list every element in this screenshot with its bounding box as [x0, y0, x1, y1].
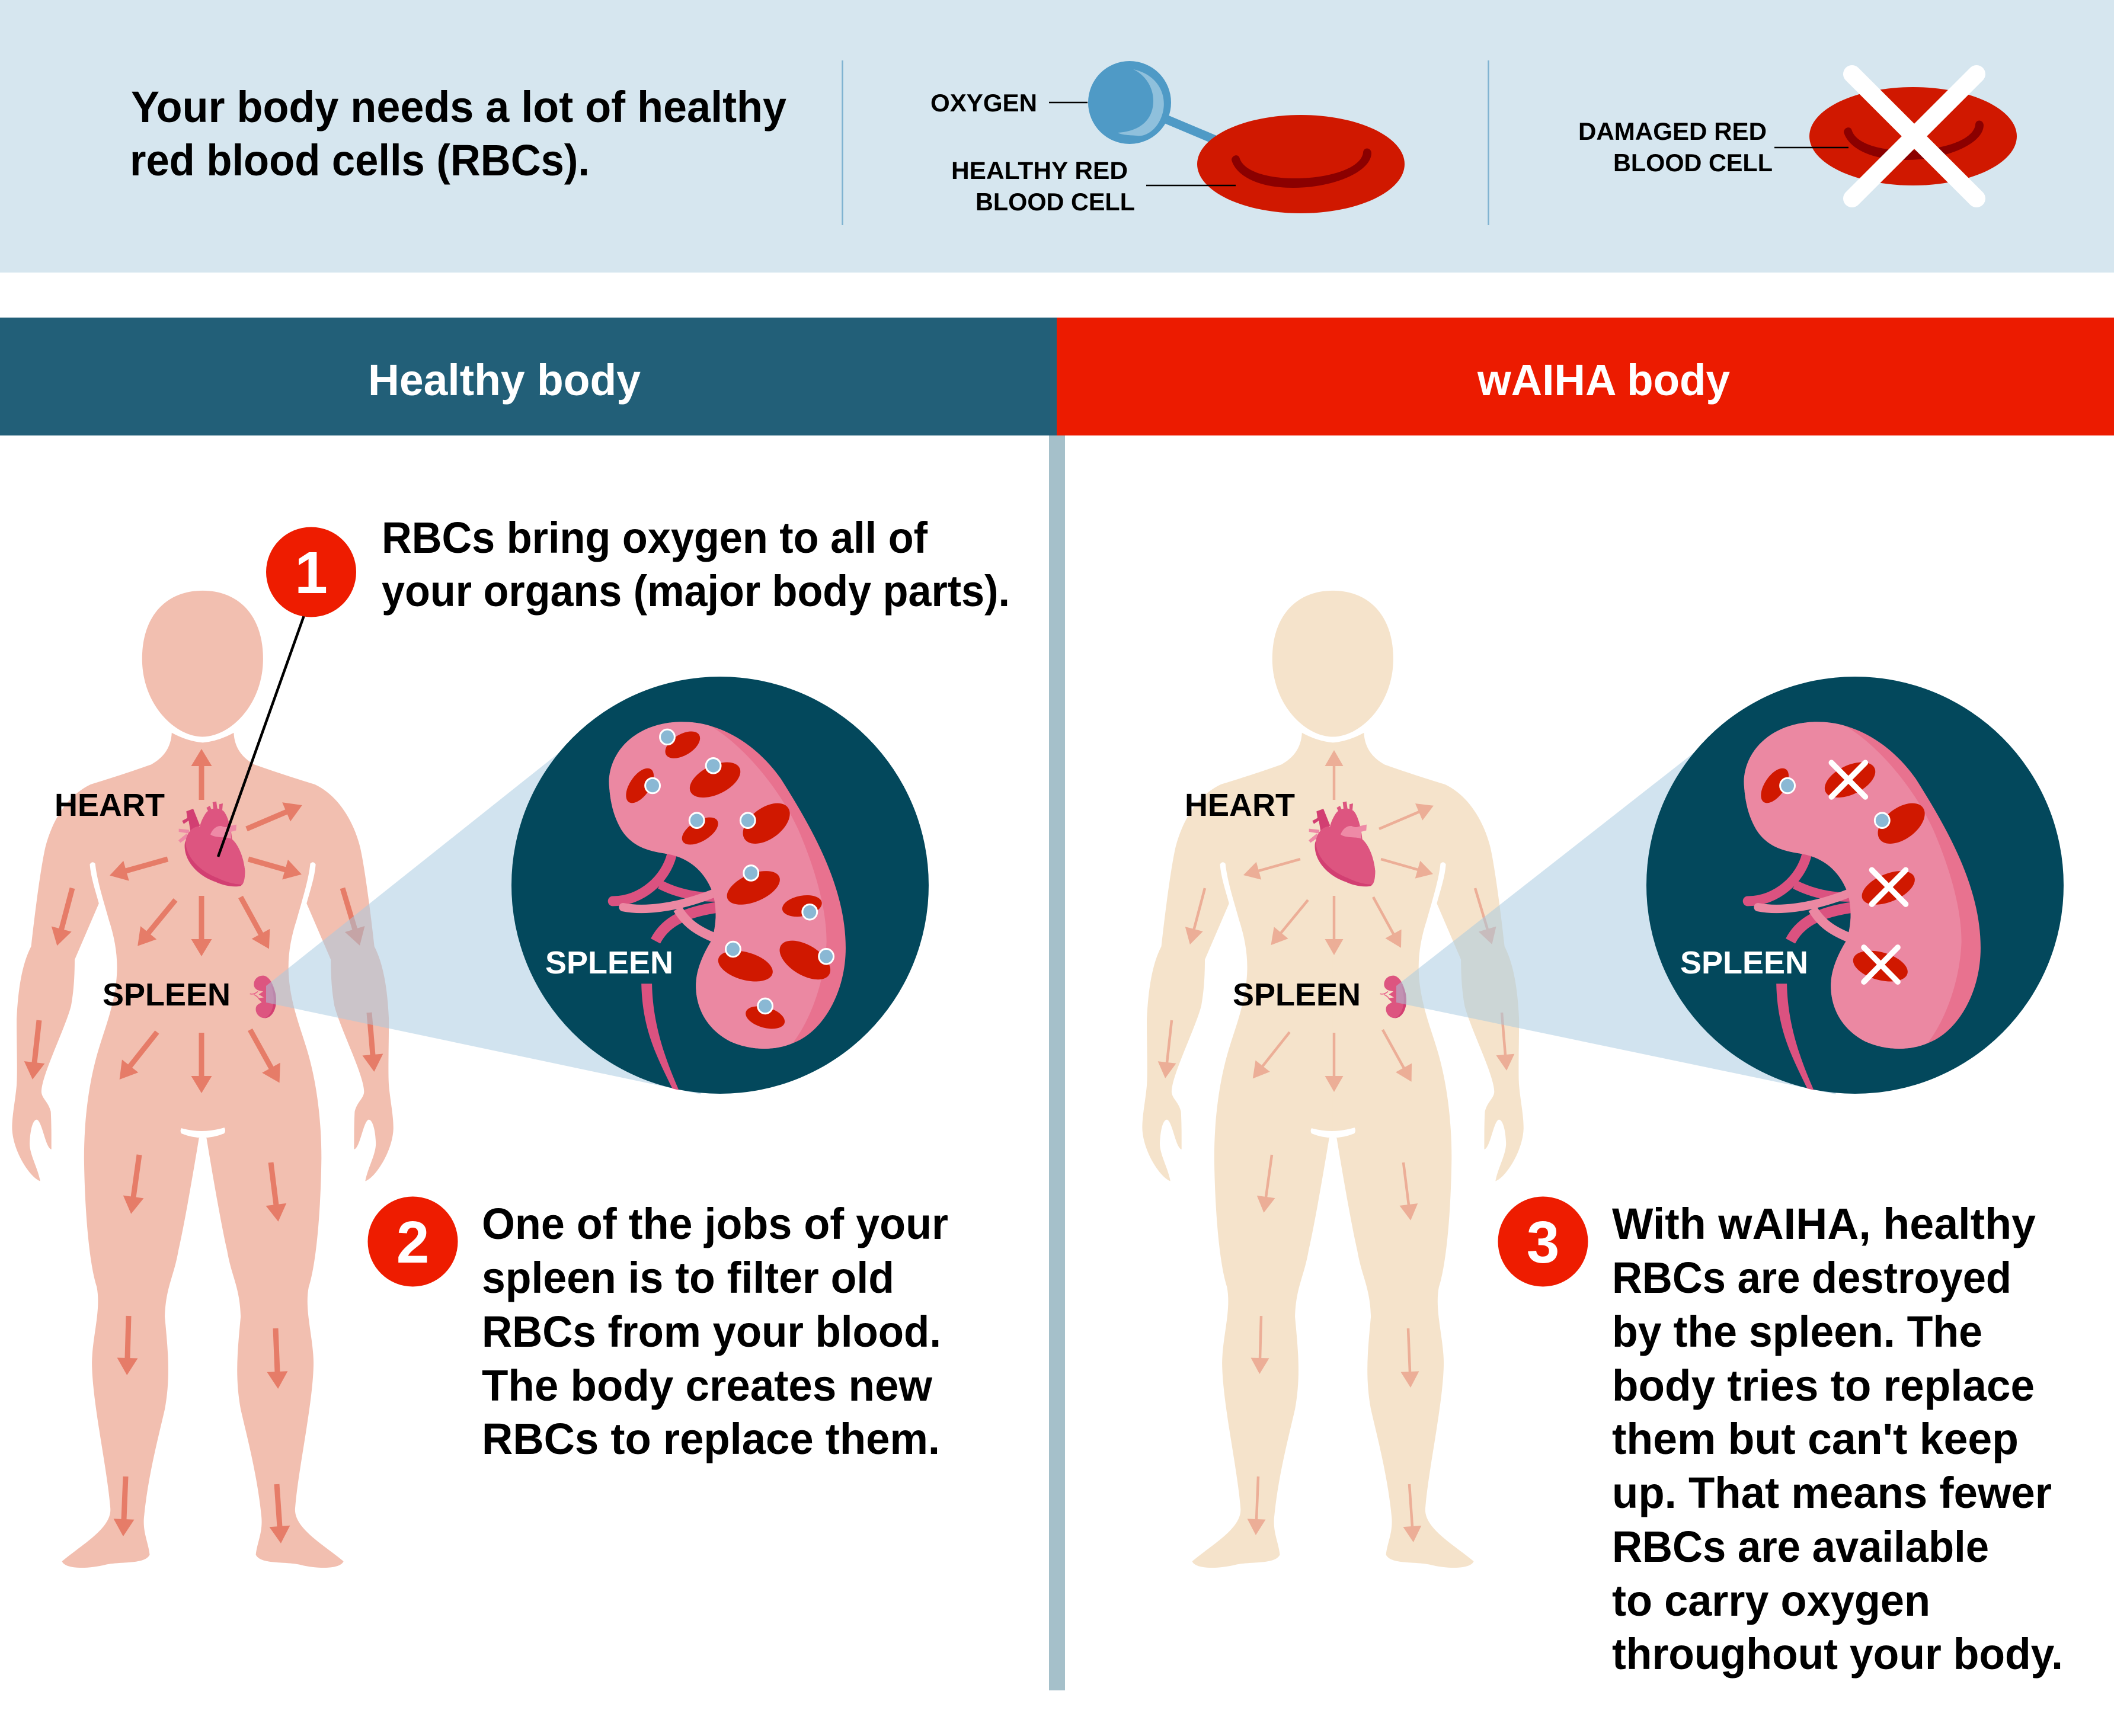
zoom beam [1396, 745, 1836, 1094]
badge: step 2: 2 [396, 1209, 429, 1276]
label: heart: HEART [55, 787, 165, 823]
header: healthy body: Healthy body [368, 355, 641, 405]
figure: wAIHA body silhouette [1142, 591, 1524, 1568]
arrows: reduced oxygen flow in wAIHA body [1167, 765, 1505, 1527]
icon: heart [1309, 802, 1375, 886]
label: spleen: SPLEEN [1233, 977, 1361, 1013]
icon: small spleen [250, 976, 276, 1018]
header: wAIHA body: wAIHA body [1477, 355, 1730, 405]
icon: heart [178, 802, 245, 886]
label: damaged red blood cell: BLOOD CELL [1613, 149, 1773, 177]
callout: spleen close-up with healthy cells [511, 677, 929, 1094]
header: wAIHA body [1057, 318, 2114, 435]
label: healthy red blood cell [951, 156, 1236, 216]
label: spleen in close-up: SPLEEN [1680, 945, 1808, 981]
text: step 3: them but can't keep [1612, 1414, 2019, 1463]
text: step 3: RBCs are available [1612, 1522, 1989, 1571]
text: step 2: spleen is to filter old [482, 1253, 894, 1302]
text: step 3: to carry oxygen [1612, 1576, 1930, 1625]
label: spleen: SPLEEN [103, 977, 231, 1013]
text: step 2: RBCs from your blood. [482, 1307, 941, 1356]
label: spleen in close-up: SPLEEN [545, 945, 673, 981]
figure: healthy body silhouette [12, 591, 394, 1568]
leader line from step 1 to heart [218, 614, 305, 857]
icon: oxygen molecule attached to healthy red blood cell [1088, 61, 1405, 213]
header: healthy body [0, 318, 1057, 435]
label: heart: HEART [1185, 787, 1295, 823]
text: step 3: body tries to replace [1612, 1361, 2035, 1410]
label: damaged red blood cell: DAMAGED RED [1578, 117, 1767, 145]
text: step 1: your organs (major body parts). [382, 566, 1010, 616]
text: step 2: RBCs to replace them. [482, 1414, 940, 1463]
badge: step 3: 3 [1527, 1209, 1559, 1276]
text: step 2: The body creates new [482, 1361, 932, 1410]
intro heading: Your body needs a lot of healthy [131, 82, 786, 132]
icon: small spleen [1380, 976, 1406, 1018]
panel: healthy body [12, 513, 1010, 1568]
icon: damaged red blood cell crossed out [1809, 74, 2017, 198]
text: step 3: up. That means fewer [1612, 1468, 2052, 1517]
label: healthy red blood cell: HEALTHY RED [951, 156, 1128, 184]
text: step 3: throughout your body. [1612, 1629, 2063, 1679]
text: step 3: by the spleen. The [1612, 1307, 1982, 1356]
text: step 3: With wAIHA, healthy [1612, 1199, 2036, 1248]
panel: wAIHA body [1142, 591, 2064, 1679]
text: step 3: RBCs are destroyed [1612, 1253, 2011, 1302]
badge: step 2 [367, 1197, 458, 1287]
text: step 1: RBCs bring oxygen to all of [382, 513, 928, 562]
badge: step 3 [1498, 1197, 1588, 1287]
label: damaged red blood cell [1578, 117, 1848, 177]
text: step 2: One of the jobs of your [482, 1199, 948, 1248]
label: healthy red blood cell: BLOOD CELL [976, 188, 1135, 216]
panel: intro banner [0, 0, 2114, 273]
arrows: oxygen flow in healthy body [34, 765, 373, 1527]
intro heading: red blood cells (RBCs). [130, 136, 590, 185]
zoom beam [266, 745, 701, 1094]
label: oxygen: OXYGEN [930, 89, 1037, 117]
badge: step 1 [266, 527, 356, 617]
callout: spleen close-up with damaged cells [1646, 677, 2064, 1094]
badge: step 1: 1 [295, 540, 328, 606]
